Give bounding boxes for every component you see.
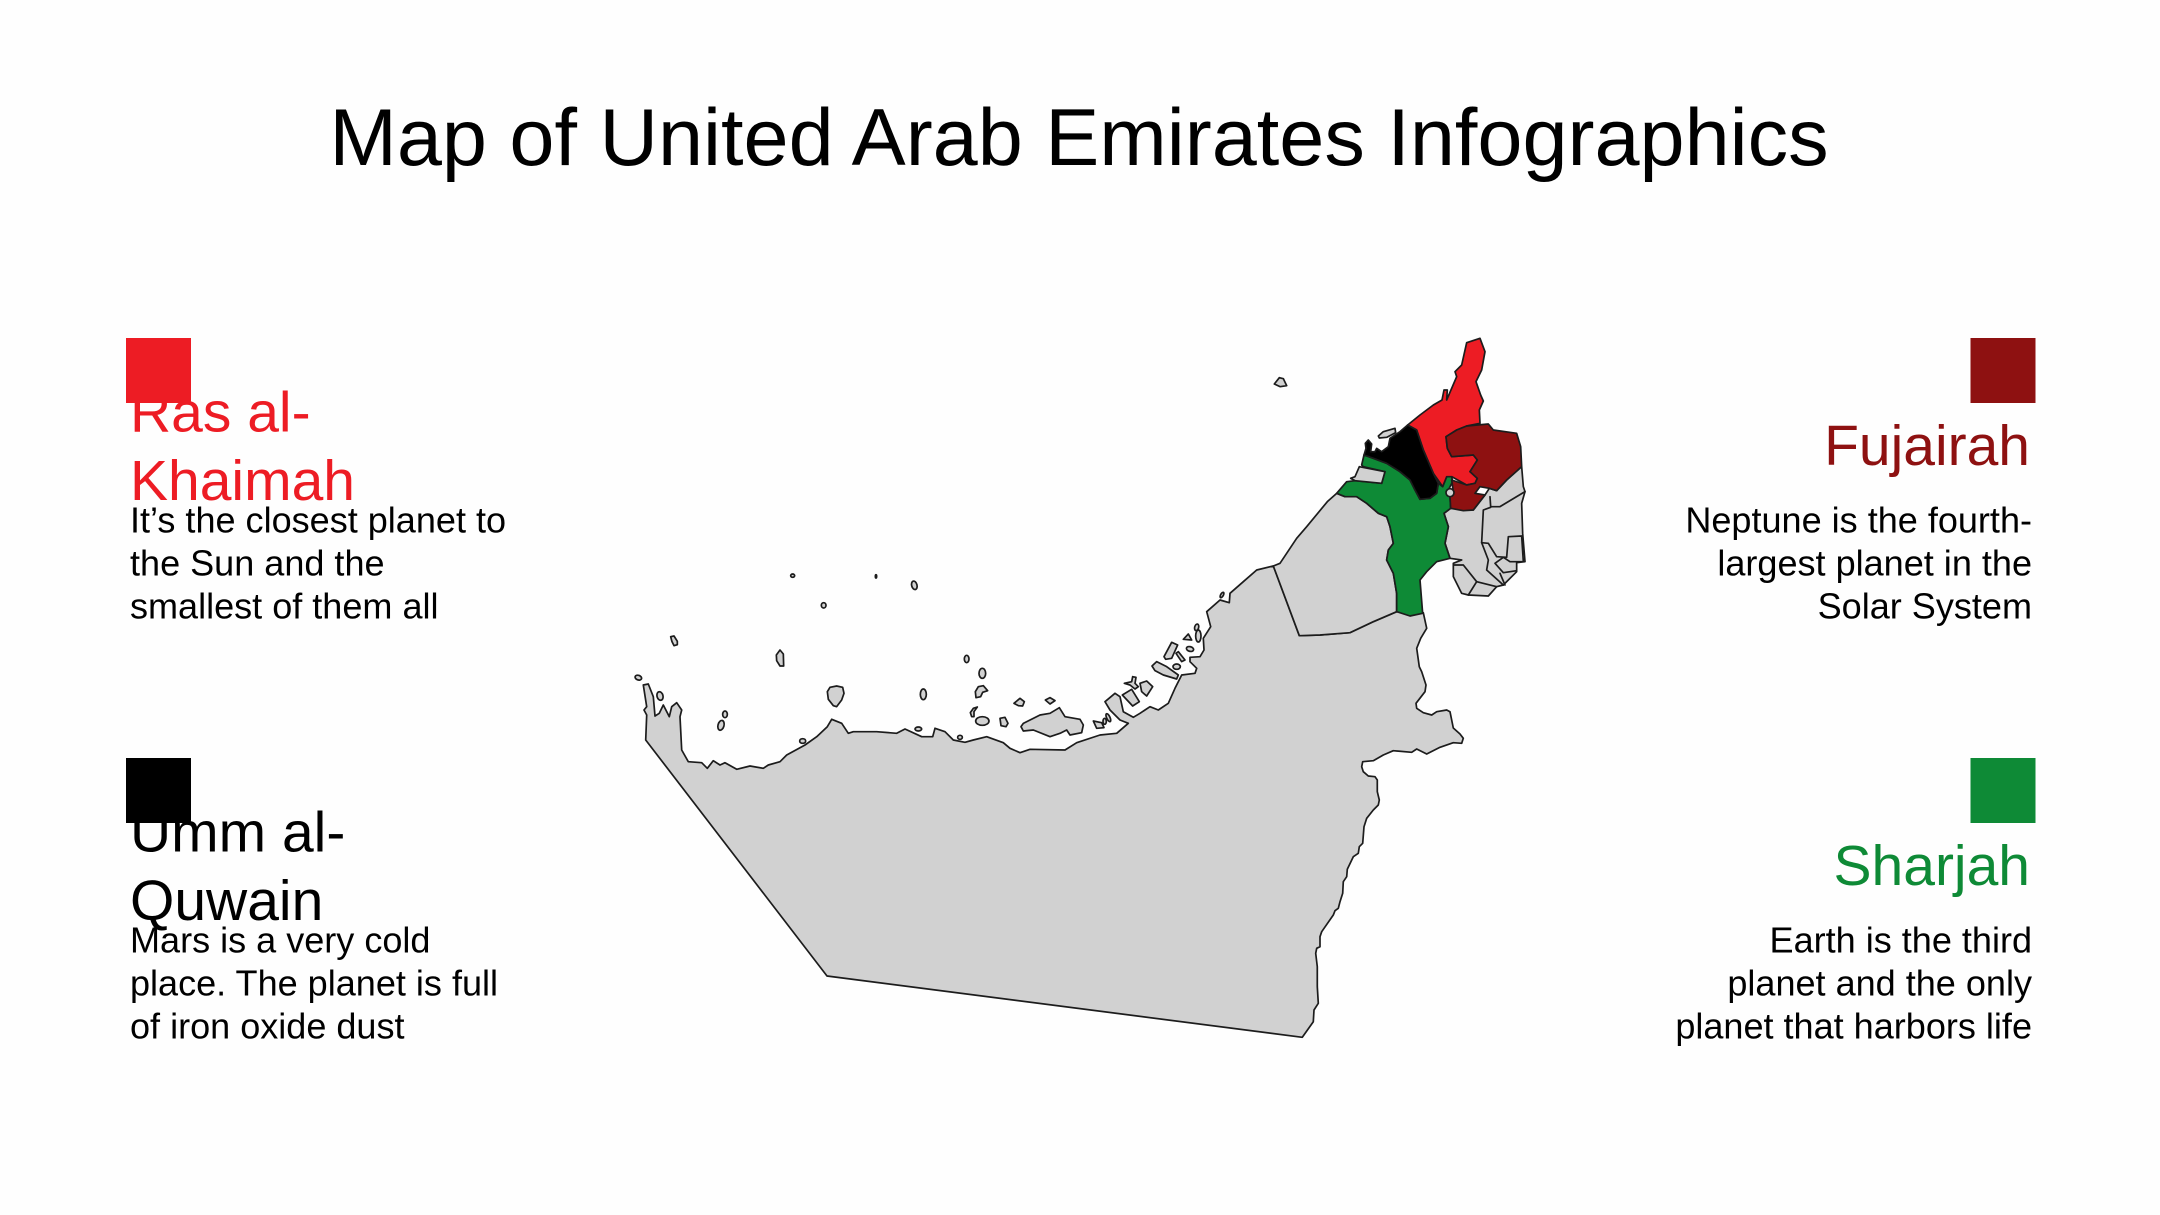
- region: Umm al-Quwain: [1364, 425, 1438, 499]
- panel: Umm al-Quwain: [126, 758, 498, 1046]
- region: Fujairah: [1446, 424, 1522, 511]
- text: Ras al-Khaimah description: smallest of them all: [130, 586, 439, 626]
- text: Sharjah description: planet that harbors life: [1675, 1006, 2032, 1046]
- text: Fujairah description: largest planet in the: [1717, 542, 2032, 584]
- icon: dark red square: [1970, 338, 2036, 403]
- icon: green square: [1970, 758, 2036, 823]
- panel: Ras al-Khaimah: [126, 338, 506, 626]
- small enclave: [1446, 489, 1454, 497]
- northern emirates: [1273, 338, 1525, 636]
- island: near Umm al-Quwain: [1378, 428, 1396, 438]
- islands: eastern archipelago: [1000, 592, 1225, 737]
- text: Umm al-Quwain description: place. The planet is full: [130, 962, 498, 1004]
- heading: Ras al-Khaimah: Khaimah: [130, 449, 355, 513]
- region: Sharjah: [1337, 455, 1453, 616]
- text: Fujairah description: Neptune is the fourth-: [1685, 500, 2032, 540]
- heading: Fujairah: Fujairah: [1824, 414, 2030, 478]
- text: Fujairah description: Solar System: [1818, 586, 2032, 626]
- heading: Umm al-Quwain: Umm al-: [130, 801, 345, 865]
- region: Ras al-Khaimah: [1408, 338, 1485, 487]
- heading: Sharjah: Sharjah: [1834, 834, 2030, 898]
- text: Umm al-Quwain description: Mars is a very cold: [130, 920, 430, 960]
- title: Map of United Arab Emirates Infographics: [329, 93, 1829, 183]
- text: Sharjah description: planet and the only: [1727, 962, 2032, 1004]
- region: Abu Dhabi mainland: [643, 566, 1463, 1037]
- text: Ras al-Khaimah description: It’s the closest planet to: [130, 500, 506, 540]
- panel: Sharjah: [1675, 758, 2036, 1046]
- region: eastern districts: [1444, 467, 1525, 596]
- heading: Ras al-Khaimah: Ras al-: [130, 381, 311, 445]
- text: Ras al-Khaimah description: the Sun and the: [130, 542, 385, 584]
- text: Umm al-Quwain description: of iron oxide dust: [130, 1006, 405, 1046]
- heading: Umm al-Quwain: Quwain: [130, 869, 323, 933]
- island: Abu Musa: [1274, 378, 1287, 387]
- panel: Fujairah: [1685, 338, 2036, 626]
- map of the United Arab Emirates: [634, 338, 1525, 1037]
- text: Sharjah description: Earth is the third: [1770, 920, 2032, 960]
- region: Dubai: [1273, 493, 1397, 636]
- icon: black square: [126, 758, 191, 823]
- icon: red square: [126, 338, 191, 403]
- region: Ajman: [1351, 467, 1385, 483]
- islands: western and central coast: [634, 574, 989, 743]
- district borders: [1453, 492, 1525, 595]
